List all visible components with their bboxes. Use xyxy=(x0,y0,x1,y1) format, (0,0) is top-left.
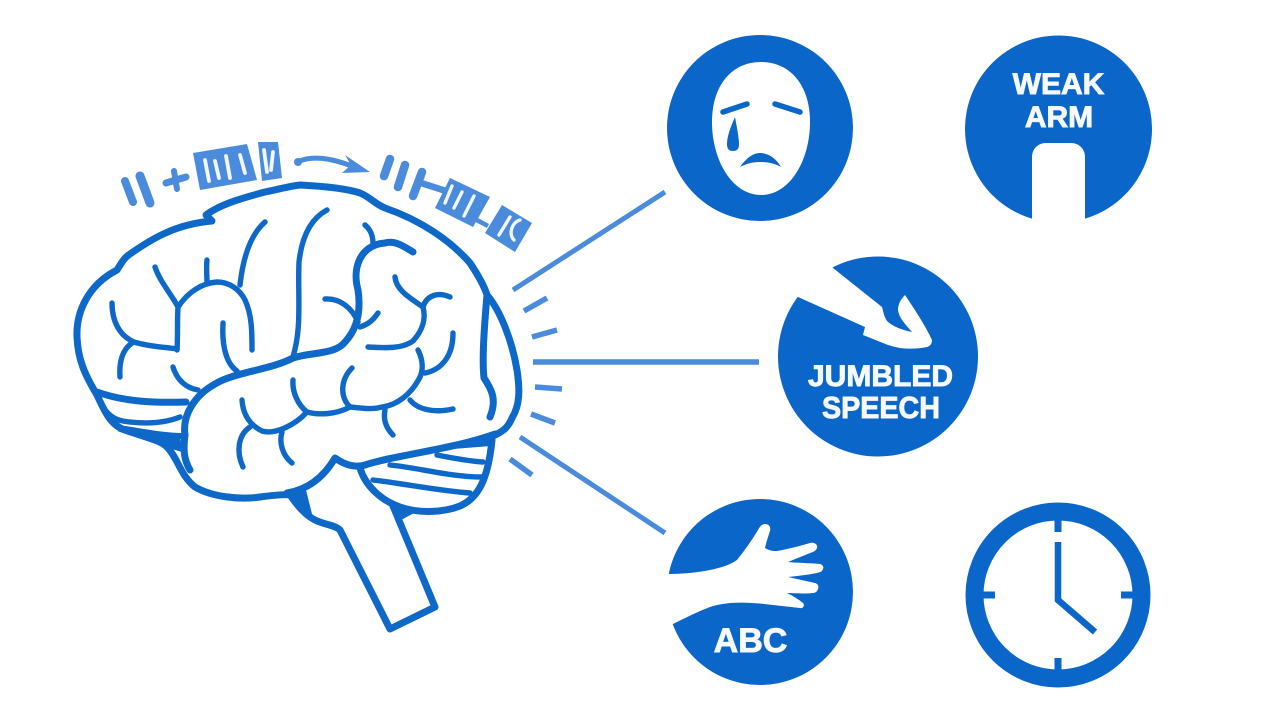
drooping mouth shape xyxy=(770,250,932,349)
hand silhouette xyxy=(650,524,823,624)
brain folds xyxy=(103,210,483,493)
thick junctions at stem and lobes xyxy=(117,431,497,520)
glitch bars right xyxy=(384,159,446,196)
line to speech icon xyxy=(533,359,759,365)
icon: numb hand xyxy=(650,499,853,685)
arrow xyxy=(294,155,370,173)
glitch bars left xyxy=(125,171,186,203)
line to face icon xyxy=(513,192,665,290)
label: ABC: ABC xyxy=(714,622,787,660)
face shape xyxy=(712,62,810,195)
line to hand icon xyxy=(520,437,665,533)
icon: weak arm xyxy=(965,36,1152,235)
icon: clock xyxy=(974,512,1142,678)
mouth xyxy=(740,153,781,167)
icon: weak arm: ARM xyxy=(1025,101,1093,134)
illustration: brain outline xyxy=(77,185,519,629)
eyebrows xyxy=(723,104,800,112)
icon: jumbled speech: SPEECH xyxy=(822,390,940,425)
brain outer contour xyxy=(77,185,519,629)
tear xyxy=(727,117,739,151)
clock hands xyxy=(1058,542,1095,632)
icon: crying face xyxy=(667,35,853,221)
connector lines and radiating dashes xyxy=(510,192,759,533)
garbled speech stream above the brain xyxy=(125,142,532,252)
label: jumbled speech: JUMBLED xyxy=(808,360,953,393)
glitched word boxes right xyxy=(435,178,532,252)
radiating dashes xyxy=(510,298,562,475)
clock ticks xyxy=(978,515,1138,675)
icon: jumbled speech xyxy=(770,250,978,456)
label: weak arm: WEAK xyxy=(1013,68,1105,101)
arm silhouette xyxy=(1032,143,1085,235)
glitched word boxes left xyxy=(193,142,282,190)
